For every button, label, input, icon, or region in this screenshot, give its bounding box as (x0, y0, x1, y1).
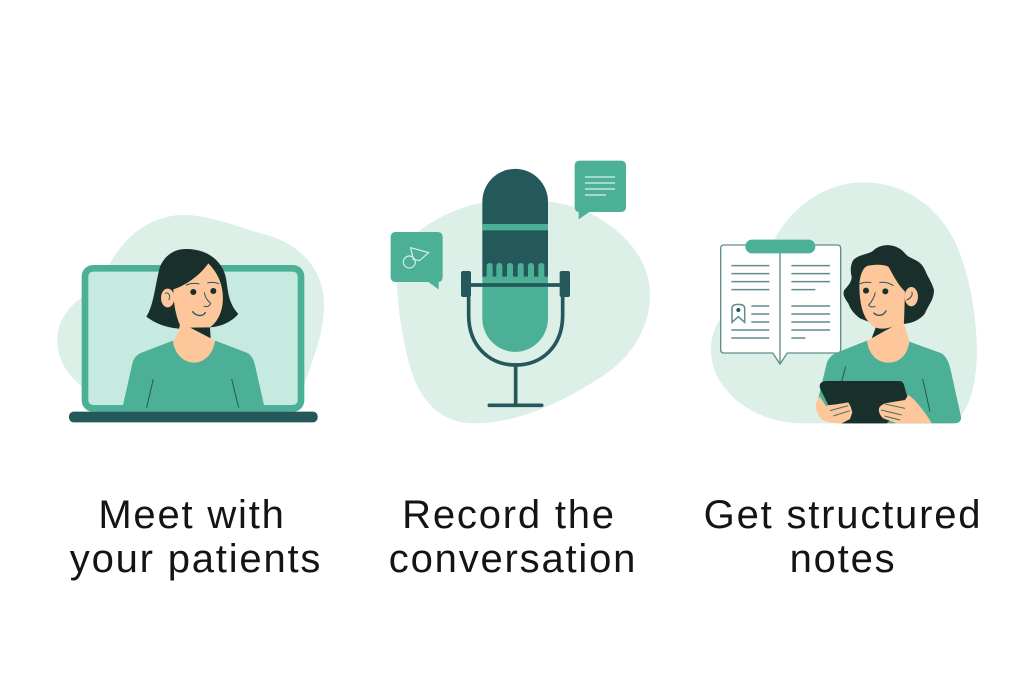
face (859, 265, 905, 329)
nose and mouth (869, 292, 875, 307)
text lines (731, 266, 830, 338)
hair (146, 249, 238, 338)
neck (173, 323, 215, 363)
stand (489, 365, 542, 405)
right hand and fingers (879, 395, 932, 423)
tablet (820, 381, 909, 423)
mic lower body (482, 278, 548, 352)
caption: meet with your patients: Meet with (98, 493, 286, 537)
person (816, 245, 961, 423)
left fingers (828, 402, 852, 423)
ear (905, 287, 918, 306)
nose and mouth (204, 292, 211, 307)
panel: meet with patients illustration (57, 215, 324, 422)
hair (844, 245, 934, 338)
caption: record the conversation (389, 493, 637, 581)
speech bubble: icon (391, 232, 443, 289)
caption: get structured notes: Get structured (704, 493, 982, 537)
laptop screen (85, 268, 301, 408)
caption: get structured notes: notes (790, 537, 896, 581)
mic holder (466, 279, 565, 290)
mic upper body (482, 169, 548, 278)
caption: get structured notes (704, 493, 982, 581)
left hand (816, 397, 852, 423)
clip (745, 240, 815, 253)
background blob (397, 200, 650, 423)
caption: record the conversation: Record the (402, 493, 616, 537)
bookmark icon (732, 304, 745, 322)
eyes and brows (863, 288, 869, 294)
mic grille (482, 263, 548, 278)
ear (161, 289, 174, 307)
shirt (123, 341, 264, 407)
face (173, 263, 223, 328)
background blob (711, 182, 977, 423)
document (721, 240, 841, 364)
panel: structured notes illustration (711, 182, 977, 423)
shirt (818, 341, 961, 423)
person (123, 249, 264, 408)
caption: record the conversation: conversation (389, 537, 637, 581)
panel: record conversation illustration (391, 161, 650, 423)
background blob (57, 215, 324, 410)
eyes and brows (190, 289, 196, 295)
microphone (461, 169, 570, 405)
caption: meet with your patients (70, 493, 322, 581)
caption: meet with your patients: your patients (70, 537, 322, 581)
speech bubble: notes (575, 161, 626, 219)
neck (867, 318, 909, 363)
mic band (482, 224, 548, 230)
laptop base (69, 412, 318, 422)
